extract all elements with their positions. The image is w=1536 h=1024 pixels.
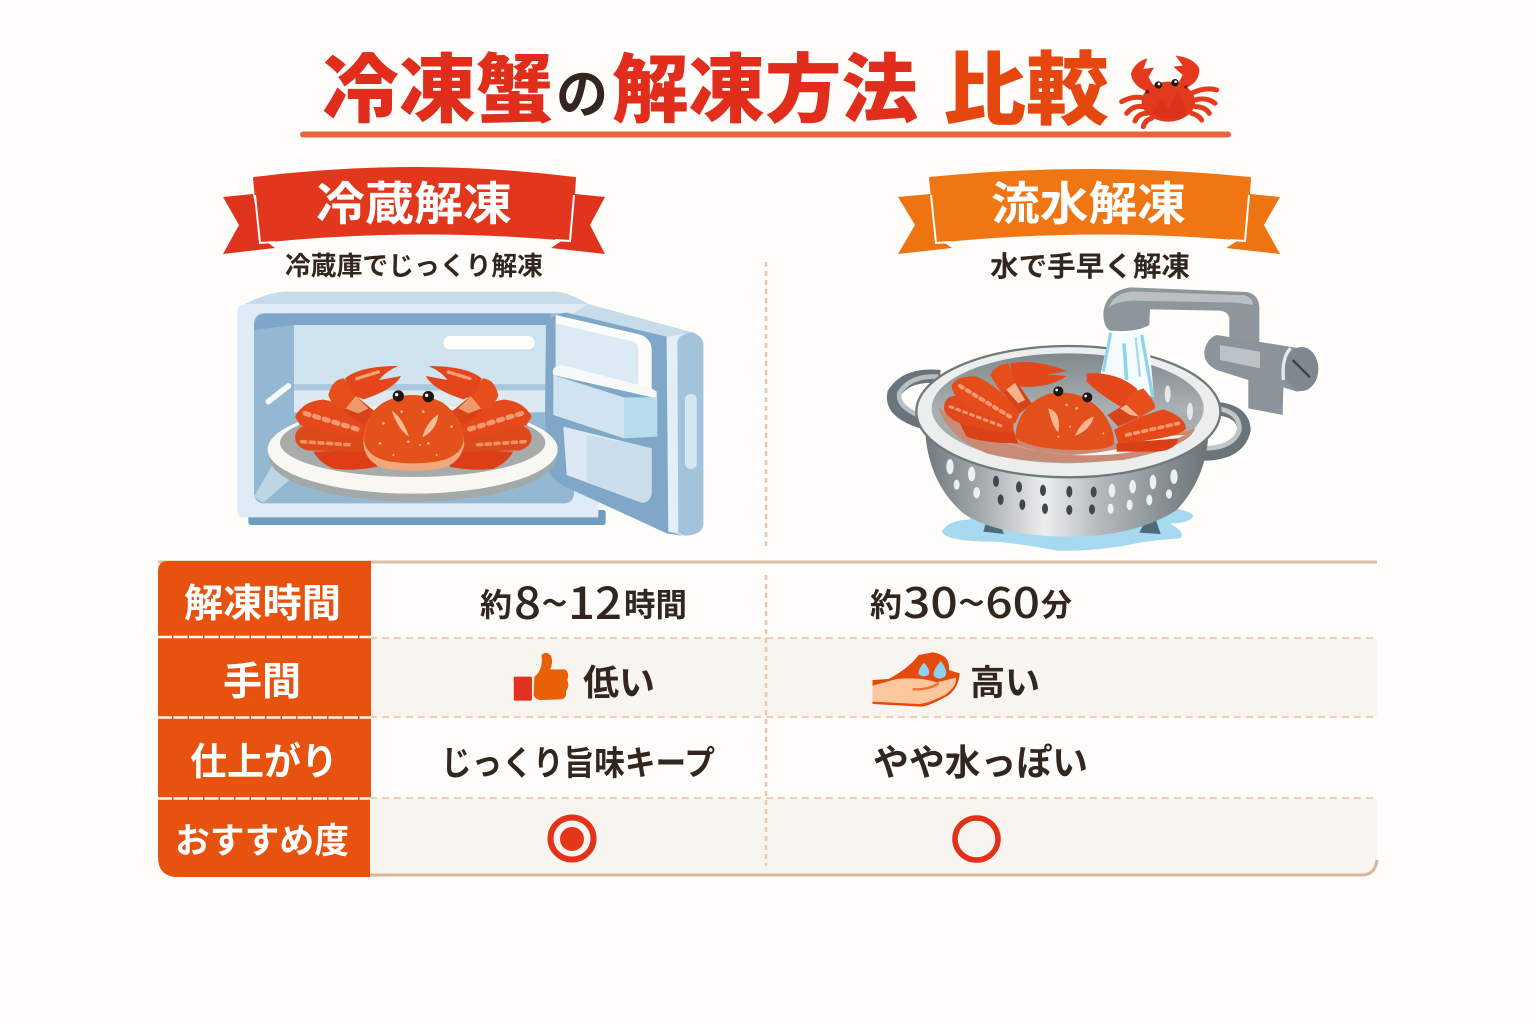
row header column: 手間: [223, 651, 301, 707]
subtitle: 冷蔵庫でじっくり解凍: [285, 246, 543, 283]
icon: title crab: [1122, 56, 1217, 127]
title: 冷凍蟹: [322, 29, 553, 138]
crab: [944, 362, 1186, 452]
illustration: crab in colander under faucet: [894, 287, 1318, 551]
row: 解凍時間 values: [480, 568, 1072, 632]
water and sauce: [938, 407, 1195, 462]
row: 仕上がり values: じっくり旨味キープ: [441, 736, 715, 785]
row header column: おすすめ度: [175, 813, 349, 864]
title: 解凍方法: [612, 29, 918, 138]
door: [545, 304, 703, 536]
icon: single circle: [955, 818, 998, 860]
panel: running water thawing heading: [898, 168, 1280, 285]
panel: refrigerator thawing heading: [223, 168, 605, 283]
bowl: [925, 430, 1208, 537]
comparison table: [158, 561, 1377, 877]
row: 手間 values: 高い: [970, 655, 1040, 706]
shell: [363, 395, 464, 471]
plate: [268, 405, 558, 502]
row header column: [158, 561, 371, 877]
banner: 冷蔵解凍: 冷蔵解凍: [316, 168, 512, 234]
banner: 流水解凍: 流水解凍: [991, 168, 1186, 234]
crab: [295, 366, 532, 471]
row: 仕上がり values: [441, 734, 1088, 786]
rim and inside: [916, 346, 1220, 477]
icon: thumbs up: [514, 653, 568, 701]
row: 解凍時間 values: 30~60: [903, 570, 1040, 631]
fridge body: [237, 292, 606, 525]
faucet: [1103, 287, 1318, 415]
table rows background: [370, 562, 1377, 875]
feet: [983, 515, 1004, 534]
illustration: crab on plate in refrigerator: [237, 292, 703, 536]
icon: hand with water drops: [873, 652, 960, 707]
title: [322, 26, 1109, 142]
subtitle: 水で手早く解凍: [990, 245, 1190, 285]
right legs: [426, 366, 532, 470]
row: 解凍時間 values: 時間: [624, 580, 687, 626]
icon: double circle: [550, 818, 594, 860]
title underline: [300, 132, 1231, 138]
row: 解凍時間 values: 分: [1041, 580, 1072, 625]
row: 手間 values: 低い: [583, 654, 655, 706]
row: 仕上がり values: やや水っぽい: [873, 734, 1088, 786]
row header column: 解凍時間: [184, 573, 341, 629]
holes: [946, 459, 1178, 515]
title: の: [556, 50, 608, 129]
row: 解凍時間 values: 約: [480, 580, 512, 626]
handles: [894, 376, 1244, 454]
title: 比較: [943, 26, 1109, 142]
water puddle: [942, 509, 1193, 551]
row: 解凍時間 values: 8~12: [514, 568, 622, 632]
row header column: 仕上がり: [190, 731, 338, 786]
row: 解凍時間 values: 約: [870, 580, 902, 626]
banner: 冷蔵解凍: [223, 168, 605, 254]
banner: 流水解凍: [898, 168, 1280, 254]
left legs: [295, 366, 401, 470]
row: 手間 values: [514, 652, 1040, 707]
water stream: [1100, 332, 1154, 397]
row: おすすめ度 values: [550, 818, 998, 860]
